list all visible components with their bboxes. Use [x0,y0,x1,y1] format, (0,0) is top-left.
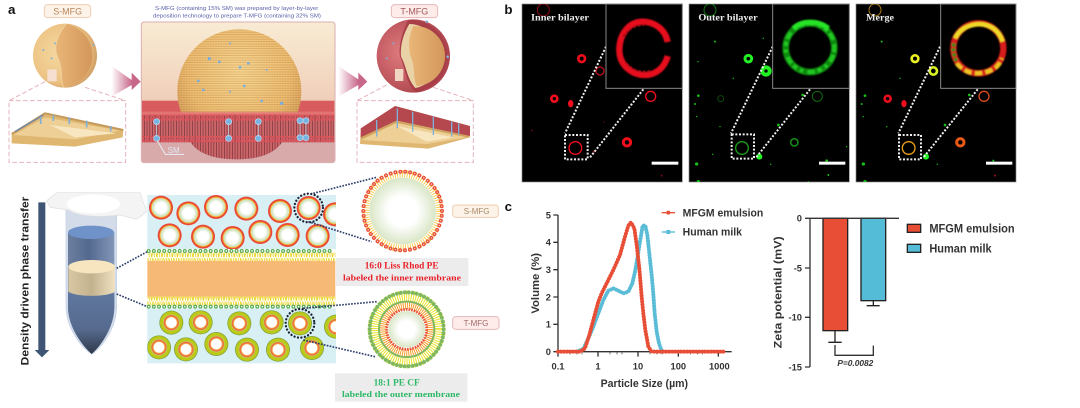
panel a: bottom row, density driven phase transfer [20,172,499,402]
description text: S-MFG (containing 15% SM) was prepared by layer-by-layer [155,6,318,12]
image label: Inner bilayer [531,14,589,24]
legend: Human milk [929,242,992,255]
grey box: outer membrane label [335,373,467,402]
y tick labels: -15 [789,362,802,372]
image label: Outer bilayer [698,14,758,24]
dotted connectors: tube to layer diagram [117,252,147,307]
big droplet [177,29,302,114]
y tick labels [789,214,802,372]
zoom guide lines for S-MFG inset [9,82,126,101]
y tick labels: 3 [546,265,551,275]
scale bar [986,162,1012,165]
grey box: inner membrane label: labeled the inner membrane [343,272,461,282]
panel letter a: a [8,2,16,17]
x tick labels: 1 [595,361,601,371]
legend [662,208,764,238]
detail: T-MFG vesicle [370,292,444,366]
magnified inset [773,4,849,88]
S-MFG phase [147,195,347,250]
detail: S-MFG vesicle [363,172,442,250]
label: S-MFG small [453,205,498,217]
legend: MFGM emulsion [683,208,764,220]
zoom guide lines for T-MFG inset [357,85,473,101]
bar: MFGM emulsion [823,218,848,342]
legend: Human milk [683,226,743,238]
description text: deposition technology to prepare T-MFG (containing 32% SM) [153,13,321,19]
label: T-MFG: T-MFG [400,7,428,17]
label: SM: SM [168,146,180,155]
x tick labels: 100 [671,361,686,371]
label: SM [157,141,184,155]
icon: T-MFG droplet sphere [377,19,450,93]
panel: droplet on membrane illustration [141,22,335,163]
magnified inset [606,4,682,88]
panel letter c: c [505,199,513,214]
y axis title: Volume (%) [530,253,542,314]
image label: Merge [866,14,894,24]
label: T-MFG small [453,317,499,329]
grey box: inner membrane label: 16:0 Liss Rhod PE [365,262,439,272]
x axis title: Particle Size (µm) [601,378,688,390]
y tick labels: 4 [546,238,552,248]
dotted zoom box [731,47,810,159]
SM molecules in membrane [154,118,309,141]
label: T-MFG [391,5,438,18]
micrograph: inner bilayer [522,4,682,182]
x tick labels: 0.1 [552,361,564,371]
inset: T-MFG membrane slab [357,101,473,162]
magnified inset [941,4,1016,88]
micrograph: outer bilayer [689,4,849,183]
inset: S-MFG membrane slab [9,101,126,162]
diagram: phase layers [147,195,348,363]
grey box: outer membrane label: labeled the outer membrane [342,389,460,399]
y tick labels: -5 [794,263,802,273]
panel b: confocal microscopy images [504,2,1016,183]
axis text: density driven phase transfer: Density driven phase transfer [20,196,32,365]
label: S-MFG [44,5,91,18]
grey box: outer membrane label: 18:1 PE CF [374,378,420,388]
series: human milk [577,226,663,352]
description text [153,6,321,19]
line chart: particle size distribution [530,208,764,390]
chart axes [553,215,732,357]
label: T-MFG small: T-MFG [464,319,488,328]
x tick labels [552,361,730,371]
bar: human milk [861,218,886,306]
x tick labels: 1000 [709,361,730,371]
significance bracket [835,345,874,368]
legend [907,222,1015,255]
icon: centrifuge tube [47,193,147,354]
y tick labels: 0 [797,214,802,224]
dotted zoom box [898,47,978,159]
bar chart axes [805,218,899,367]
dotted callouts around selected vesicles [286,194,323,338]
arrow: S-MFG to centre panel [112,66,141,97]
y tick labels [546,210,552,357]
legend: MFGM emulsion [929,222,1015,235]
x tick labels: 10 [633,361,643,371]
T-MFG phase [147,307,348,363]
arrow: density direction [35,202,49,357]
label: S-MFG small: S-MFG [464,207,490,216]
dotted zoom box [565,47,643,159]
interface layer with lipids [147,249,335,306]
scale bar [819,162,845,165]
y axis title: Zeta potential (mV) [773,236,785,348]
y tick labels: -10 [789,313,802,323]
panel a: top row, preparation of S-MFG and T-MFG [8,2,473,163]
y tick labels: 2 [546,292,551,302]
significance bracket: P=0.0082 [837,359,874,368]
micrograph: merge [856,4,1016,183]
panel c: particle size and zeta potential [505,199,1015,390]
grey box: inner membrane label [336,258,468,286]
scale bar [652,162,678,165]
panel letter b: b [504,2,512,17]
y tick labels: 0 [546,347,551,357]
series: MFGM emulsion [558,222,723,352]
label: S-MFG: S-MFG [53,7,82,17]
arrow: centre panel to T-MFG [338,66,367,97]
dotted connectors: vesicles to detail views [303,177,377,357]
y tick labels: 1 [546,320,551,330]
bar chart: zeta potential [773,214,1015,372]
y tick labels: 5 [546,210,551,220]
icon: S-MFG droplet sphere [33,24,97,88]
